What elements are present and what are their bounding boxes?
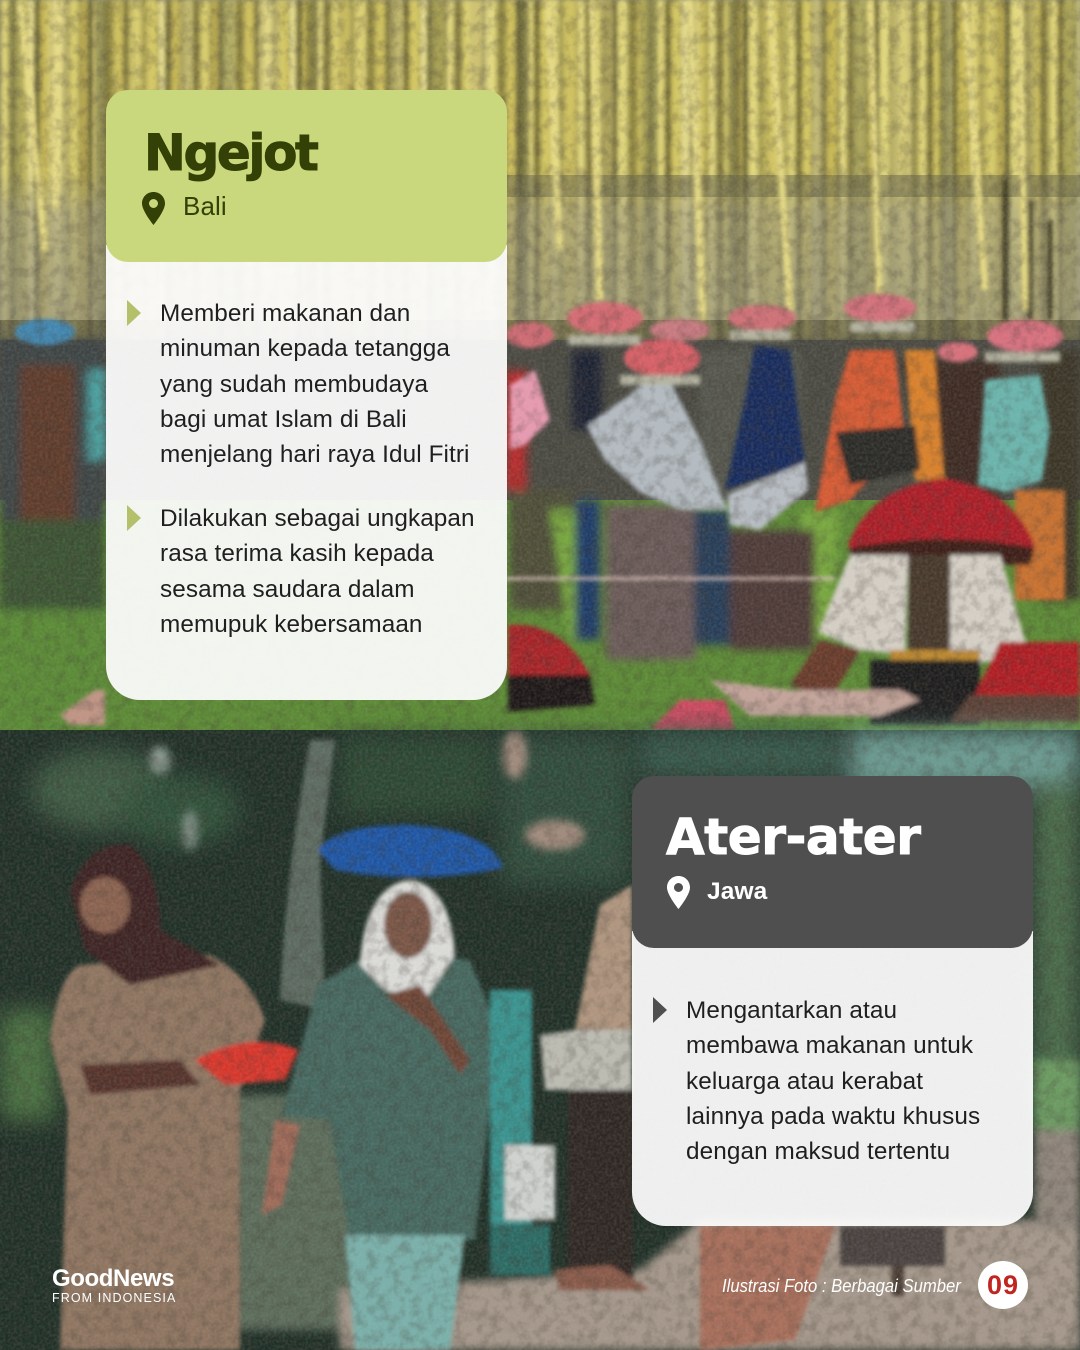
panel: Ngejot bbox=[106, 90, 507, 700]
text: first point: yang sudah membudaya bbox=[160, 371, 428, 398]
panel body: Ngejot description bbox=[106, 245, 507, 700]
heading panel: Ater-ater bbox=[632, 776, 1033, 948]
text: point: membawa makanan untuk bbox=[686, 1032, 973, 1059]
text: second point: Dilakukan sebagai ungkapan bbox=[160, 505, 475, 532]
text: first point: Memberi makanan dan bbox=[160, 300, 410, 327]
text: point: keluarga atau kerabat bbox=[686, 1068, 923, 1095]
text: point bbox=[686, 997, 980, 1165]
text: first point: minuman kepada tetangga bbox=[160, 335, 450, 362]
text: second point: rasa terima kasih kepada bbox=[160, 540, 434, 567]
location: Jawa: Jawa bbox=[707, 878, 767, 905]
bullet marker bbox=[127, 300, 141, 326]
heading panel: Ngejot bbox=[106, 90, 507, 262]
photo credit: Ilustrasi Foto : Berbagai Sumber bbox=[722, 1276, 961, 1296]
text: first point bbox=[160, 300, 470, 468]
photo: Ater-ater women bbox=[0, 730, 1080, 1350]
icon: location pin bbox=[142, 192, 165, 225]
page number badge bbox=[978, 1261, 1028, 1309]
logo: GoodNews from Indonesia: FROM INDONESIA bbox=[52, 1291, 176, 1305]
text: point: lainnya pada waktu khusus bbox=[686, 1103, 980, 1130]
page number badge: 09 bbox=[987, 1270, 1019, 1300]
location: Bali: Bali bbox=[183, 191, 227, 221]
bullet marker bbox=[653, 997, 667, 1023]
text: second point: sesama saudara dalam bbox=[160, 576, 415, 603]
text: point: Mengantarkan atau bbox=[686, 997, 897, 1024]
panel body: Ater-ater description bbox=[632, 931, 1033, 1226]
panel: Ater-ater bbox=[632, 776, 1033, 1226]
text: point: dengan maksud tertentu bbox=[686, 1138, 950, 1165]
logo: GoodNews from Indonesia: GoodNews bbox=[52, 1265, 174, 1292]
text: first point: bagi umat Islam di Bali bbox=[160, 406, 407, 433]
logo: GoodNews from Indonesia bbox=[52, 1265, 176, 1305]
bullet marker bbox=[127, 505, 141, 531]
title: Ngejot: Ngejot bbox=[144, 124, 317, 182]
text: second point bbox=[160, 505, 475, 638]
text: second point: memupuk kebersamaan bbox=[160, 611, 423, 638]
title: Ater-ater: Ater-ater bbox=[666, 808, 921, 866]
text: first point: menjelang hari raya Idul Fitri bbox=[160, 441, 470, 468]
icon: location pin bbox=[667, 876, 690, 909]
photo: Ngejot procession bbox=[0, 0, 1080, 730]
